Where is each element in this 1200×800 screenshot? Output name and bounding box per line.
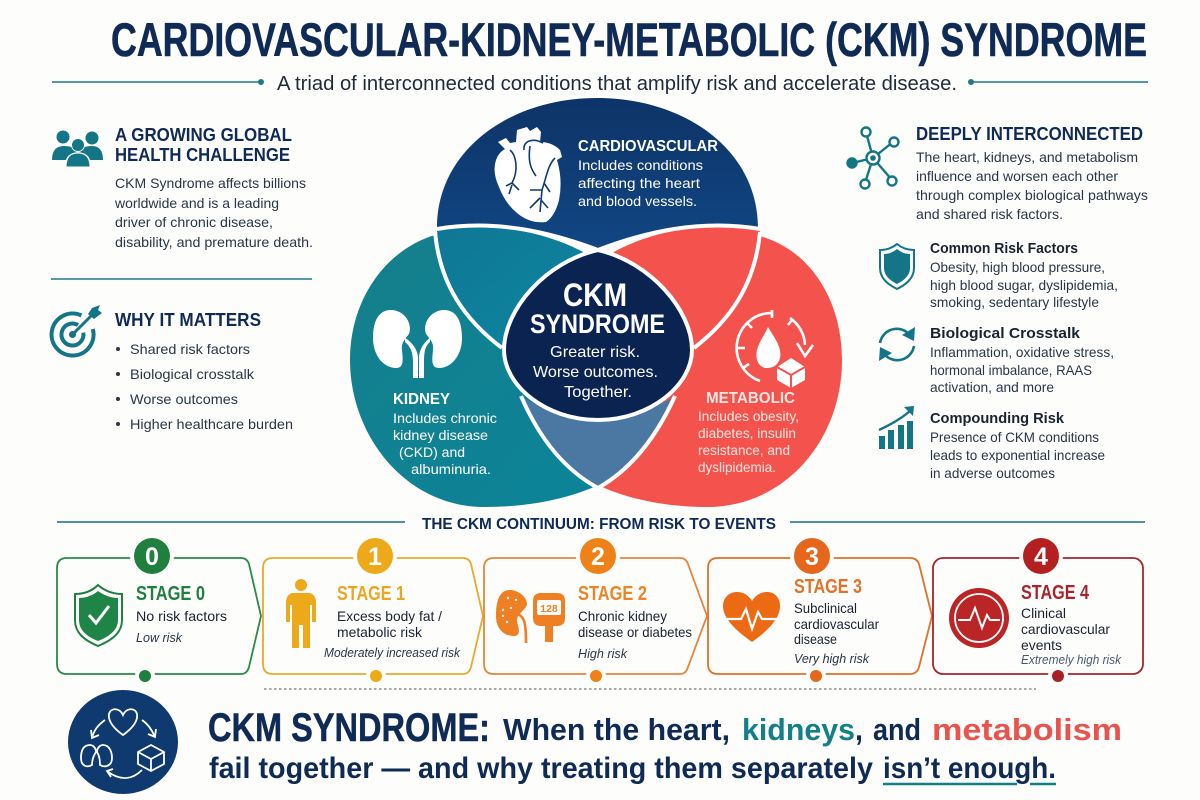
- tagline: metabolism: [932, 712, 1122, 747]
- body text: disability, and premature death.: [115, 234, 313, 250]
- body text: The heart, kidneys, and metabolism: [916, 149, 1138, 165]
- text: [930, 325, 1114, 395]
- text: smoking, sedentary lifestyle: [930, 294, 1099, 310]
- venn: cardio-metabolic overlap: [612, 227, 760, 348]
- panel: why it matters: [52, 305, 293, 432]
- icon: shield: [880, 244, 914, 289]
- heading: WHY IT MATTERS: [115, 310, 261, 330]
- body text: driver of chronic disease,: [115, 214, 273, 230]
- badge 0: 0: [145, 543, 159, 571]
- text: [930, 240, 1118, 310]
- center label: CKM: [563, 277, 627, 313]
- text: in adverse outcomes: [930, 465, 1055, 481]
- kidney label: [393, 391, 497, 477]
- icon: kidney and glucose meter: [496, 590, 565, 643]
- panel: compounding risk: [879, 406, 1105, 481]
- text: STAGE 0: [136, 583, 205, 605]
- center label: Greater risk.: [550, 344, 640, 361]
- kidney label: (CKD) and: [399, 444, 465, 460]
- text: [578, 583, 692, 661]
- stage 0 card: [57, 534, 261, 686]
- panel: biological crosstalk: [879, 325, 1114, 395]
- text: Low risk: [136, 630, 183, 645]
- icon: heart: [495, 127, 562, 222]
- heading: [115, 125, 292, 165]
- tagline: ,: [855, 712, 863, 747]
- panel: common risk factors: [880, 240, 1118, 310]
- icon: pulse circle: [949, 588, 1009, 648]
- icon: growth chart: [879, 406, 914, 449]
- cardiovascular label: and blood vessels.: [578, 193, 697, 209]
- kidney label: KIDNEY: [393, 391, 450, 408]
- metabolic label: dyslipidemia.: [698, 459, 776, 475]
- tagline: CKM SYNDROME:: [208, 706, 490, 750]
- text: STAGE 3: [794, 576, 862, 598]
- text: cardiovascular: [1021, 621, 1110, 637]
- text: Compounding Risk: [930, 410, 1065, 427]
- stage 3 card: [708, 534, 932, 686]
- body text: [916, 149, 1148, 222]
- bullet list: [116, 341, 293, 432]
- tagline: fail together — and why treating them separately: [209, 752, 873, 785]
- venn outlines: [435, 226, 760, 488]
- text: cardiovascular: [794, 616, 879, 632]
- text: Biological Crosstalk: [930, 325, 1081, 342]
- venn: cardiovascular region: [437, 98, 758, 250]
- heading: A GROWING GLOBAL: [115, 125, 292, 145]
- panel: global health challenge: [52, 125, 313, 250]
- metabolic label: Includes obesity,: [698, 408, 799, 424]
- text: Moderately increased risk: [324, 645, 461, 660]
- icon: people: [52, 130, 103, 167]
- text: Clinical: [1021, 605, 1066, 621]
- text: No risk factors: [136, 608, 227, 624]
- subtitle: [52, 73, 1148, 95]
- center label: Worse outcomes.: [533, 364, 658, 381]
- text: Very high risk: [794, 651, 870, 666]
- venn: cardio-kidney overlap: [437, 227, 585, 348]
- text: Chronic kidney: [578, 608, 667, 624]
- body text: CKM Syndrome affects billions: [115, 175, 306, 191]
- tagline: isn’t enough.: [883, 752, 1056, 785]
- tagline: [208, 706, 1122, 785]
- icon: shield check: [75, 585, 122, 646]
- kidney label: albuminuria.: [411, 461, 491, 477]
- text: [1021, 582, 1122, 667]
- cardiovascular label: Includes conditions: [578, 157, 703, 173]
- text: disease: [794, 631, 837, 647]
- venn: kidney-metabolic overlap: [521, 396, 675, 487]
- body text: influence and worsen each other: [916, 168, 1118, 184]
- badge 1: [353, 534, 397, 578]
- metabolic label: METABOLIC: [706, 390, 795, 407]
- badge 3: 3: [805, 543, 819, 571]
- stage 4 card: [933, 534, 1143, 686]
- icon: metabolic: [737, 310, 813, 388]
- center label: Together.: [564, 384, 632, 401]
- text: STAGE 4: [1021, 582, 1090, 604]
- kidney label: Includes chronic: [393, 410, 497, 426]
- panel: deeply interconnected: [848, 124, 1148, 222]
- icon: cycle arrows: [879, 327, 915, 361]
- heading: DEEPLY INTERCONNECTED: [916, 124, 1143, 144]
- text: leads to exponential increase: [930, 447, 1105, 463]
- venn: center: [504, 250, 692, 420]
- metabolic label: diabetes, insulin: [698, 425, 796, 441]
- badge 0: [130, 534, 174, 578]
- badge 2: [576, 534, 620, 578]
- subtitle: A triad of interconnected conditions that amplify risk and accelerate disease.: [277, 73, 957, 95]
- text: [324, 583, 461, 660]
- body text: through complex biological pathways: [916, 187, 1148, 203]
- text: STAGE 1: [337, 583, 405, 605]
- metabolic label: resistance, and: [698, 442, 790, 458]
- cardiovascular label: affecting the heart: [578, 175, 700, 191]
- center label: [530, 277, 665, 401]
- text: events: [1021, 637, 1062, 653]
- venn: kidney region: [350, 235, 598, 507]
- text: High risk: [578, 646, 628, 661]
- text: metabolic risk: [337, 624, 423, 640]
- bullet list: Higher healthcare burden: [130, 416, 293, 432]
- text: Excess body fat /: [337, 608, 442, 624]
- text: activation, and more: [930, 379, 1054, 395]
- text: Inflammation, oxidative stress,: [930, 344, 1114, 360]
- text: Common Risk Factors: [930, 240, 1078, 257]
- text: Obesity, high blood pressure,: [930, 259, 1105, 275]
- cardiovascular label: [578, 138, 718, 209]
- text: hormonal imbalance, RAAS: [930, 362, 1092, 378]
- text: high blood sugar, dyslipidemia,: [930, 277, 1118, 293]
- text: Extremely high risk: [1021, 652, 1122, 667]
- venn diagram: [350, 98, 842, 507]
- text: disease or diabetes: [578, 624, 692, 640]
- body text: worldwide and is a leading: [114, 195, 279, 211]
- icon: target: [52, 305, 102, 356]
- icon: heart pulse: [723, 592, 780, 642]
- text: [930, 410, 1105, 481]
- bullet list: Shared risk factors: [130, 341, 250, 357]
- text: Presence of CKM conditions: [930, 429, 1099, 445]
- tagline: When the heart,: [503, 712, 730, 747]
- venn: metabolic region: [598, 236, 842, 507]
- text: Subclinical: [794, 600, 857, 616]
- center label: SYNDROME: [530, 309, 665, 339]
- heading: HEALTH CHALLENGE: [115, 145, 290, 165]
- icon: person: [286, 579, 316, 648]
- tagline: kidneys: [742, 712, 855, 747]
- text: [794, 576, 879, 666]
- text: [136, 583, 227, 645]
- bullet list: Worse outcomes: [130, 391, 238, 407]
- stage 1 card: [263, 534, 483, 686]
- badge 3: [790, 534, 834, 578]
- cardiovascular label: CARDIOVASCULAR: [578, 138, 718, 155]
- badge 2: 2: [591, 543, 605, 571]
- badge 4: [1019, 534, 1063, 578]
- body text: and shared risk factors.: [916, 206, 1063, 222]
- bullet list: Biological crosstalk: [130, 366, 255, 382]
- icon: network: [848, 128, 898, 188]
- icon: syndrome circle: [68, 690, 178, 794]
- badge 1: 1: [368, 543, 382, 571]
- icon: kidneys: [373, 310, 462, 378]
- continuum heading: THE CKM CONTINUUM: FROM RISK TO EVENTS: [422, 516, 776, 533]
- badge 4: 4: [1034, 543, 1048, 571]
- metabolic label: [698, 390, 799, 475]
- stage 2 card: [484, 534, 707, 686]
- body text: [114, 175, 313, 250]
- tagline: and: [873, 712, 921, 747]
- icon: kidney and glucose meter: 128: [540, 603, 558, 615]
- kidney label: kidney disease: [393, 427, 488, 443]
- text: STAGE 2: [578, 583, 647, 605]
